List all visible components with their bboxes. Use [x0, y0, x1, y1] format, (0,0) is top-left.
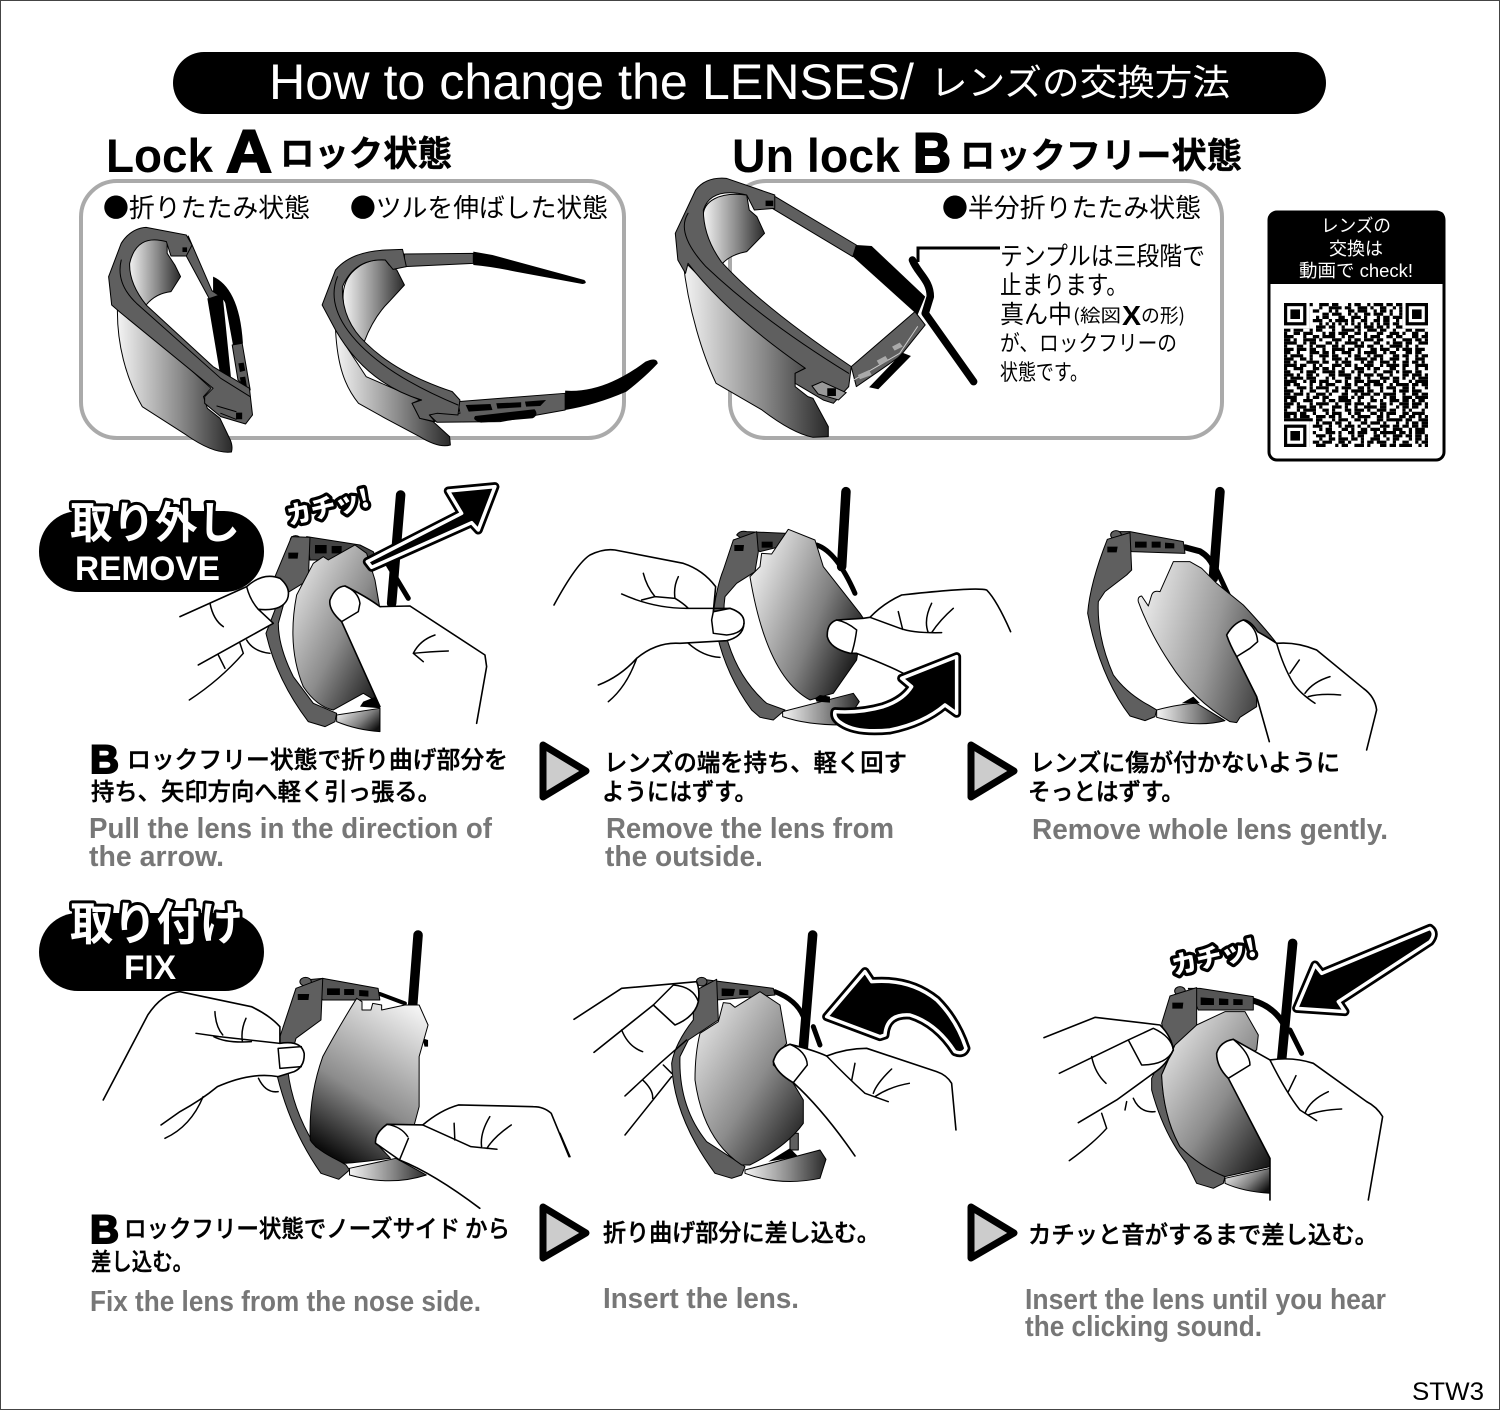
- heading: Un lock B: Un lock: [732, 129, 901, 182]
- badge label FIX: FIX: [124, 949, 176, 987]
- illustration: fix step 2: [560, 935, 966, 1182]
- callout text: temple explanation: 真ん中: [1000, 295, 1072, 331]
- callout text: temple explanation: 状態です。: [1000, 355, 1088, 387]
- step 2 text: fix: Insert the lens.: [603, 1283, 799, 1315]
- illustration: half folded glasses: [675, 178, 974, 437]
- heading: Lock A: ロック状態: [280, 126, 452, 177]
- QR code: [1284, 303, 1428, 447]
- illustration: fix step 3: [1044, 928, 1433, 1200]
- step 2 text: remove: Remove the lens from: [606, 813, 894, 845]
- step 2 text: remove: レンズの端を持ち、軽く回す: [604, 743, 907, 778]
- step 1 text: remove: Pull the lens in the direction of: [89, 813, 492, 845]
- callout text: temple explanation: [1000, 236, 1205, 387]
- callout leader line: [918, 248, 1000, 262]
- step 3 text: fix: the clicking sound.: [1025, 1311, 1262, 1343]
- step 3 text: remove: Remove whole lens gently.: [1032, 814, 1388, 846]
- step 1 text: remove: 持ち、矢印方向へ軽く引っ張る。: [91, 772, 441, 807]
- arrow: step marker fix 2 to 3: [971, 1207, 1014, 1258]
- step 2 text: remove: ようにはずす。: [602, 772, 757, 807]
- step 3 text: remove: レンズに傷が付かないように: [1030, 743, 1340, 778]
- callout text: temple explanation: の形): [1141, 301, 1185, 328]
- QR card: [1269, 211, 1445, 460]
- QR card: 交換は: [1329, 235, 1383, 261]
- QR card: レンズの: [1321, 212, 1391, 238]
- badge label REMOVE: REMOVE: [75, 550, 220, 588]
- badge title 取り付け: 取り付け: [70, 888, 243, 954]
- illustration: remove step 3: [1088, 492, 1377, 750]
- callout text: temple explanation: X: [1122, 300, 1141, 331]
- panel: unlock state: [730, 181, 1222, 438]
- title banner: [173, 52, 1326, 114]
- title text English: How to change the LENSES/: [269, 54, 914, 110]
- step 2 text: fix: [603, 1213, 880, 1315]
- heading: Lock A: A: [226, 118, 272, 185]
- arrow: step marker fix 1 to 2: [543, 1207, 586, 1258]
- callout text: temple explanation: テンプルは三段階で: [1000, 236, 1205, 273]
- illustration: remove step 2: [554, 492, 1011, 731]
- step 3 text: fix: [1025, 1215, 1386, 1343]
- illustration: folded glasses: [109, 227, 252, 452]
- heading: Lock A: Lock: [106, 129, 214, 182]
- illustration: glasses with temples extended: [322, 249, 658, 446]
- arrow: step marker 2 to 3: [971, 745, 1014, 797]
- step 1 text: remove: B: [90, 738, 119, 782]
- badge: FIX: [39, 888, 264, 991]
- heading: Un lock B: ロックフリー状態: [960, 128, 1242, 179]
- illustration: remove step 1: [180, 487, 495, 732]
- label: temples extended: ●ツルを伸ばした状態: [350, 188, 608, 225]
- sound label: click: カチッ!: [1168, 928, 1260, 983]
- step 3 text: fix: Insert the lens until you hear: [1025, 1284, 1386, 1316]
- step 1 text: remove: ロックフリー状態で折り曲げ部分を: [127, 740, 508, 775]
- illustration: fix step 1: [103, 935, 569, 1208]
- badge: REMOVE: [39, 487, 264, 592]
- step 1 text: remove: the arrow.: [89, 841, 224, 873]
- panel: lock state: [81, 181, 624, 438]
- badge title 取り外し: 取り外し: [70, 487, 240, 551]
- step 1 text: fix: [90, 1208, 510, 1318]
- callout text: temple explanation: 止まります。: [1000, 265, 1128, 302]
- callout text: temple explanation: が、ロックフリーの: [1000, 326, 1177, 358]
- callout text: temple explanation: (絵図: [1073, 302, 1121, 328]
- step 1 text: fix: B: [90, 1208, 119, 1252]
- step 3 text: remove: [1028, 743, 1388, 846]
- step 3 text: remove: そっとはずす。: [1028, 772, 1184, 807]
- step 1 text: fix: Fix the lens from the nose side.: [90, 1286, 481, 1318]
- title text Japanese: レンズの交換方法: [930, 54, 1230, 106]
- QR card: 動画で check!: [1299, 261, 1413, 281]
- model code: STW3: [1412, 1378, 1484, 1406]
- heading: Lock A: [106, 118, 452, 185]
- step 2 text: remove: [602, 743, 907, 873]
- label: folded state: ●折りたたみ状態: [103, 188, 310, 225]
- step 2 text: fix: 折り曲げ部分に差し込む。: [603, 1213, 880, 1248]
- sound label: click: カチッ!: [283, 479, 373, 533]
- heading: Un lock B: B: [913, 121, 951, 184]
- heading: Un lock B: [732, 121, 1242, 184]
- step 1 text: fix: ロックフリー状態でノーズサイド から: [124, 1209, 510, 1244]
- label: half folded: ●半分折りたたみ状態: [942, 188, 1201, 225]
- step 1 text: fix: 差し込む。: [91, 1242, 193, 1277]
- step 1 text: remove: [89, 738, 508, 873]
- arrow: step marker 1 to 2: [543, 745, 586, 797]
- step 3 text: fix: カチッと音がするまで差し込む。: [1028, 1215, 1378, 1250]
- step 2 text: remove: the outside.: [605, 841, 763, 873]
